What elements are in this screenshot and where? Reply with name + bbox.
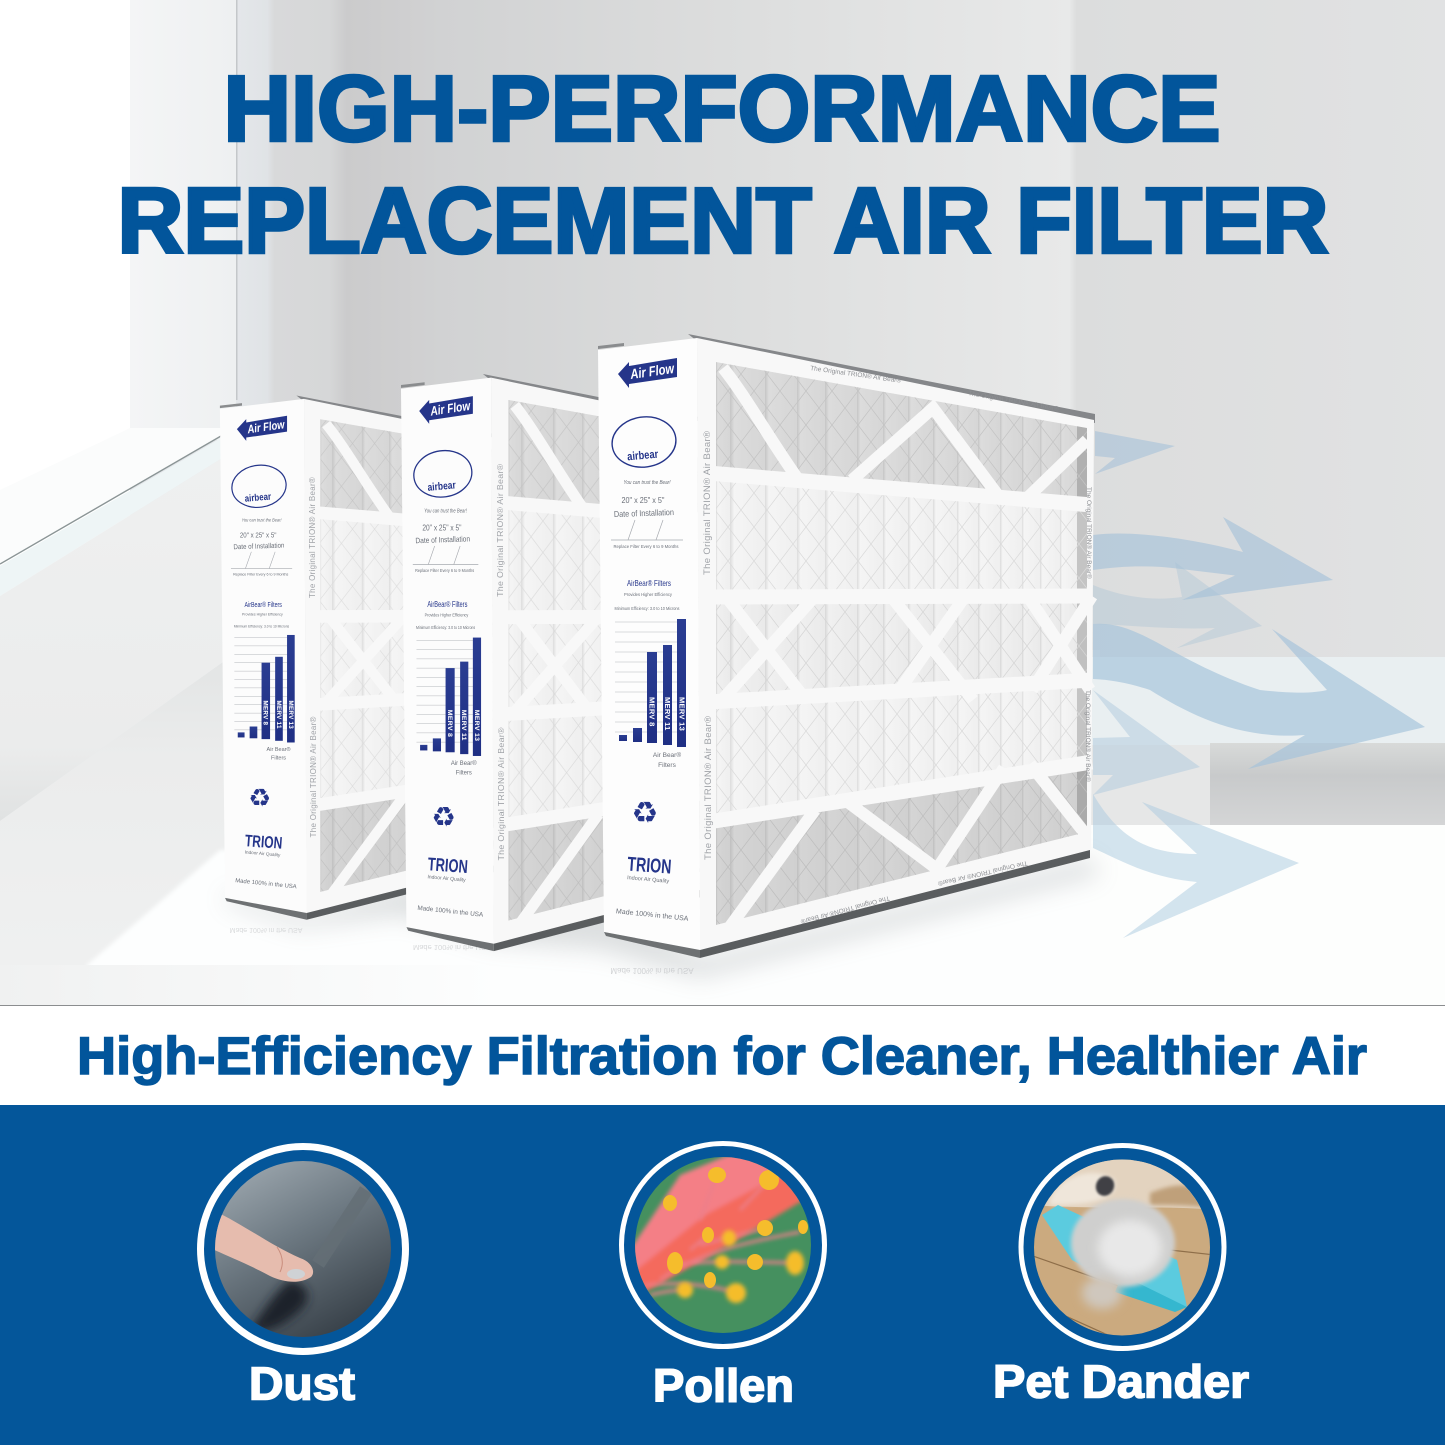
- filter: left small: airbear: [244, 491, 272, 505]
- shadows and reflections under filters: Made 100% in the USA: [610, 966, 694, 975]
- MERV bar chart: MERV 13: [678, 697, 686, 731]
- air flow arrow label: [618, 358, 677, 388]
- filter: middle: Replace Filter Every 6 to 9 Months: [415, 568, 474, 573]
- icon: pet dander ring: [1021, 1146, 1224, 1348]
- box end text: You can trust the Bear!: [624, 480, 671, 486]
- filter: middle: airbear: [427, 479, 456, 494]
- air flow arrow label: Air Flow: [628, 360, 676, 382]
- frame printed text: The Original TRION® Air Bear®: [810, 364, 902, 385]
- icon: finger on dusty surface: [215, 1161, 391, 1337]
- airflow arrows: [1093, 431, 1425, 938]
- filter: left small: 20" x 25" x 5": [240, 532, 277, 540]
- TRION logo: [627, 854, 672, 885]
- frame printed text: The Original TRION® Air Bear®: [1085, 487, 1093, 579]
- shadows and reflections under filters: Made 100% in the USA: [413, 943, 491, 952]
- box end panel: [598, 338, 700, 950]
- filter: left small: [220, 396, 642, 920]
- icon: flower stamens with pollen: [635, 1157, 811, 1333]
- icon: dog fur in dustpan: [1034, 1160, 1210, 1336]
- filter: middle: TRION: [427, 853, 469, 877]
- background room scene: [0, 0, 1445, 1006]
- shadows and reflections under filters: [226, 858, 1100, 978]
- MERV bar chart: Filters: [658, 762, 677, 769]
- pleated media: [716, 360, 1087, 930]
- filter: left small: Provides Higher Efficiency: [242, 612, 284, 617]
- filter: front large: The Original TRION® Air Bear®: [702, 431, 713, 575]
- filter: middle: The Original TRION® Air Bear®: [496, 727, 506, 861]
- box end text: Minimum Efficiency: 3.0 to 10 Microns: [614, 606, 680, 611]
- filter: middle: Air Bear®: [451, 760, 477, 767]
- MERV bar chart: [615, 619, 686, 769]
- label: Pollen: Pollen: [653, 1360, 794, 1412]
- filter: left small: The Original TRION® Air Bear®: [309, 716, 318, 837]
- filter: middle: Provides Higher Efficiency: [425, 612, 469, 617]
- frame bars and diagonals: [708, 368, 1092, 932]
- box end text: AirBear® Filters: [627, 578, 671, 588]
- blue contaminants panel: [0, 1105, 1445, 1445]
- filter: left small: Filters: [271, 755, 286, 761]
- title: HIGH-PERFORMANCE: [224, 56, 1220, 160]
- airbear logo: [609, 413, 679, 471]
- filter: left small: Replace Filter Every 6 to 9 Months: [233, 571, 288, 576]
- filter: middle: Minimum Efficiency: 3.0 to 10 Microns: [416, 625, 475, 630]
- title: REPLACEMENT AIR FILTER: [118, 168, 1328, 272]
- filter: middle: 20" x 25" x 5": [422, 523, 462, 532]
- filter: left small: Air Bear®: [267, 746, 291, 753]
- subheading band: [0, 1007, 1445, 1105]
- filter: middle: Date of Installation: [415, 534, 470, 545]
- filter: middle: Indoor Air Quality: [427, 874, 466, 884]
- box end text: [611, 480, 683, 611]
- filter: middle: AirBear® Filters: [427, 600, 467, 609]
- box end text: 20" x 25" x 5": [622, 495, 664, 505]
- filter: left small: MERV 11: [275, 700, 282, 729]
- MERV bar chart: MERV 11: [663, 697, 672, 731]
- made in USA note: Made 100% in the USA: [616, 908, 689, 923]
- box end text: Replace Filter Every 6 to 9 Months: [614, 544, 679, 549]
- MERV bar chart: Air Bear®: [653, 751, 681, 759]
- filter: left small: AirBear® Filters: [245, 601, 282, 609]
- filter: left small: Minimum Efficiency: 3.0 to 10 Microns: [234, 623, 289, 628]
- box end text: Date of Installation: [614, 507, 674, 519]
- item: dust: [200, 1146, 406, 1410]
- filter: middle: MERV 8: [446, 710, 453, 737]
- filter: middle: Filters: [456, 770, 472, 776]
- icon: dust ring: [200, 1146, 406, 1352]
- filter: left small: TRION: [244, 831, 283, 853]
- filter: front large: [598, 334, 1095, 958]
- shadows and reflections under filters: Made 100% in the USA: [230, 926, 303, 933]
- TRION logo: Indoor Air Quality: [627, 875, 670, 885]
- frame printed text: The Original TRION® Air Bear®: [937, 859, 1028, 888]
- filter: left small: Indoor Air Quality: [245, 850, 281, 858]
- icon: recycling symbol: ♻: [632, 796, 658, 831]
- filter: left small: Air Flow: [246, 417, 286, 436]
- box end text: Provides Higher Efficiency: [624, 592, 673, 598]
- frame printed text: The Original TRION® Air Bear®: [800, 894, 891, 926]
- MERV bar chart: MERV 8: [648, 697, 656, 727]
- foam edge bottom: [700, 850, 1090, 958]
- label: Dust: Dust: [249, 1358, 355, 1410]
- filter: left small: You can trust the Bear!: [242, 518, 282, 523]
- filter: middle: ♻: [432, 801, 456, 833]
- item: pet dander: [993, 1146, 1249, 1408]
- title: [118, 56, 1328, 272]
- foam edge top: [688, 334, 1095, 423]
- filter: left small: ♻: [248, 782, 271, 812]
- filter: left small: Made 100% in the USA: [235, 878, 297, 890]
- label: Pet Dander: Pet Dander: [993, 1356, 1249, 1408]
- filter: left small: The Original TRION® Air Bear®: [308, 477, 317, 598]
- filter: middle: The Original TRION® Air Bear®: [495, 463, 505, 597]
- filter: middle: Air Flow: [429, 398, 472, 419]
- filter: middle: [401, 374, 700, 952]
- TRION logo: TRION: [627, 854, 672, 879]
- subheading: High-Efficiency Filtration for Cleaner, Healthier Air: [77, 1027, 1367, 1086]
- filter: middle: You can trust the Bear!: [424, 509, 467, 515]
- filter: middle: MERV 13: [473, 710, 480, 741]
- filter: front large: The Original TRION® Air Bear®: [703, 716, 714, 860]
- airbear logo: airbear: [627, 449, 659, 463]
- frame printed text: The Original TRION® Air Bear®: [968, 389, 1060, 413]
- filter: left small: Date of Installation: [233, 542, 285, 551]
- filter: middle: MERV 11: [460, 710, 467, 741]
- item: pollen: [622, 1144, 824, 1412]
- filter: left small: MERV 13: [287, 700, 294, 729]
- filter: middle: Made 100% in the USA: [417, 905, 484, 919]
- icon: pollen ring: [622, 1144, 824, 1346]
- frame printed text: The Original TRION® Air Bear®: [1084, 690, 1092, 782]
- filter: left small: MERV 8: [262, 700, 269, 726]
- frame printed text: [800, 364, 1093, 926]
- filter face frame: [697, 338, 1094, 950]
